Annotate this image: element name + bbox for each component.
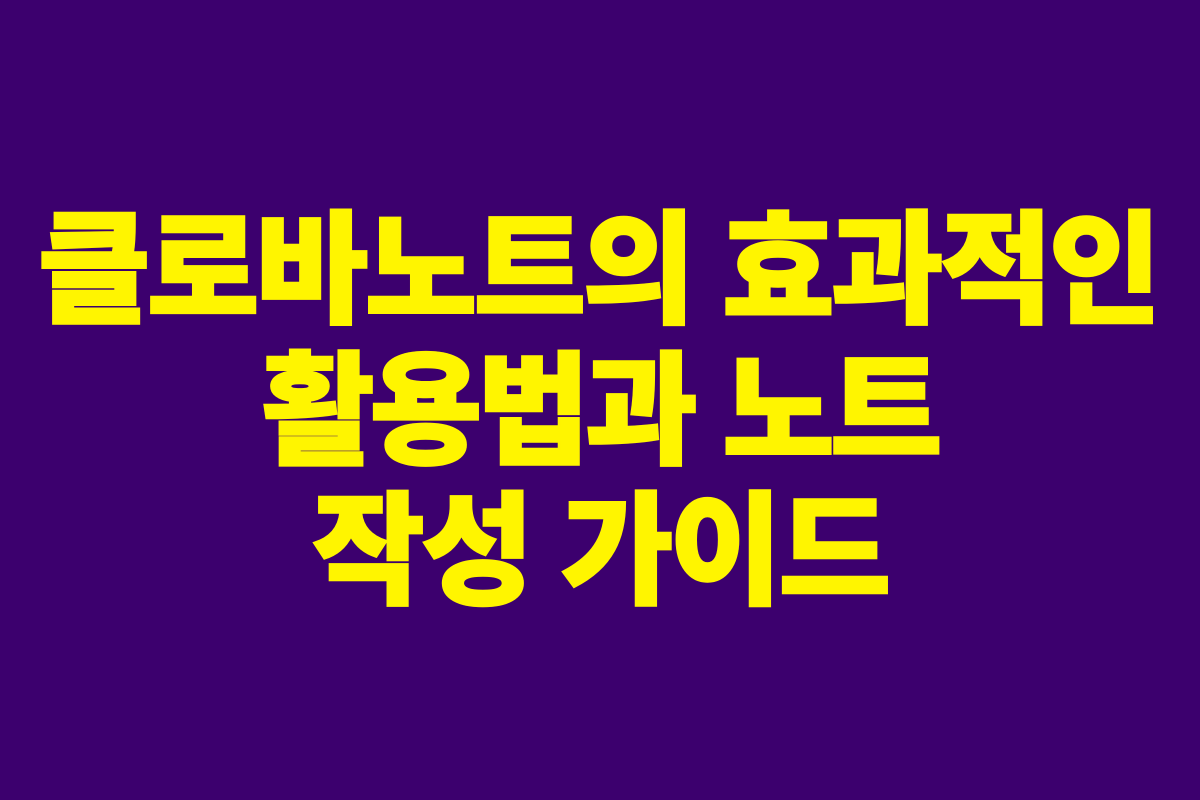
title: 활용법과 노트 [262,344,938,480]
title: 작성 가이드 [312,484,888,620]
title: 클로바노트의 효과적인 [38,203,1158,339]
